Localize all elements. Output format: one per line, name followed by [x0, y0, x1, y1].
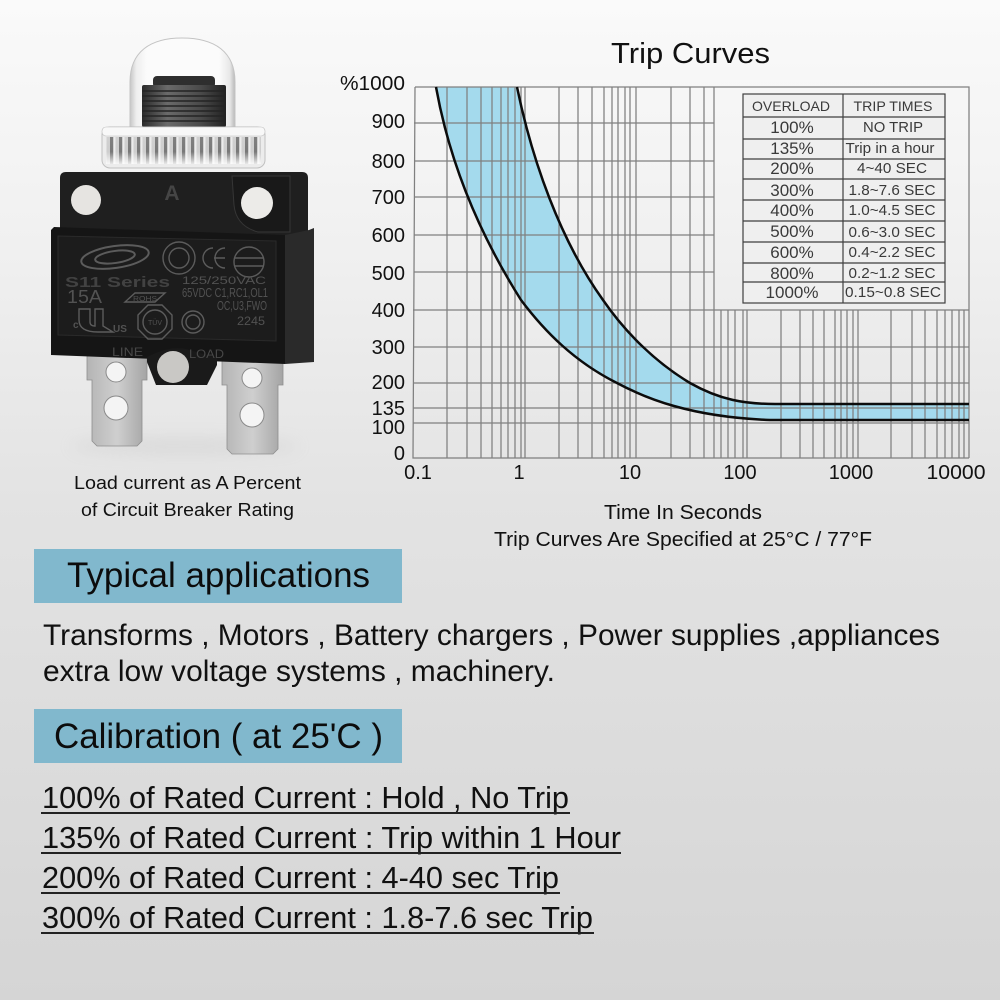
y axis labels: 400 — [372, 300, 405, 322]
threaded stem — [142, 76, 226, 127]
trip times column: TRIP TIMES — [854, 98, 932, 114]
trip band fill — [436, 87, 969, 420]
overload column: 600% — [770, 243, 814, 262]
overload column: 135% — [770, 139, 814, 158]
center latch — [147, 348, 217, 385]
certification marks — [79, 242, 264, 339]
trip times column: 0.6~3.0 SEC — [848, 224, 936, 241]
calibration list: 135% of Rated Current : Trip within 1 Hour — [42, 820, 621, 855]
y-axis caption: Load current as A Percent — [74, 473, 301, 493]
label text: 65VDC C1,RC1,OL1 — [182, 285, 268, 300]
label text: 15A — [67, 287, 102, 307]
product photo: circuit breaker — [51, 38, 314, 454]
y axis labels: 600 — [372, 225, 405, 247]
logo — [80, 241, 150, 273]
y axis labels — [340, 73, 405, 465]
y axis labels: 700 — [372, 187, 405, 209]
y axis labels: 100 — [372, 417, 405, 439]
upper curve — [517, 87, 969, 404]
y axis labels: 500 — [372, 263, 405, 285]
calibration list: 200% of Rated Current : 4-40 sec Trip — [42, 860, 559, 895]
lower curve — [436, 87, 969, 420]
trip times column: 0.15~0.8 SEC — [845, 284, 941, 301]
trip times column: 0.2~1.2 SEC — [848, 265, 936, 282]
label text: S11 Series — [65, 274, 170, 291]
body letter A: A — [164, 182, 180, 205]
label text: US — [113, 324, 127, 335]
trip times column: Trip in a hour — [846, 140, 934, 157]
soft shadow — [70, 438, 300, 454]
trip times column: NO TRIP — [863, 119, 923, 136]
x axis labels: 10000 — [926, 462, 986, 484]
main body face — [51, 227, 285, 364]
mounting holes — [71, 185, 273, 219]
label text — [65, 274, 268, 361]
y axis labels: 900 — [372, 111, 405, 133]
x axis labels: 0.1 — [404, 462, 432, 484]
y axis labels: 135 — [372, 398, 405, 420]
label text: LINE — [112, 345, 143, 359]
overload column: 200% — [770, 159, 814, 178]
terminals — [87, 356, 283, 454]
calibration list: 100% of Rated Current : Hold , No Trip — [42, 780, 569, 815]
y axis labels: 800 — [372, 151, 405, 173]
y-axis caption: of Circuit Breaker Rating — [81, 500, 294, 520]
y axis labels: %1000 — [340, 73, 405, 95]
label text: OC,U3,FWO — [217, 298, 267, 313]
overload column: 400% — [770, 201, 814, 220]
trip times column: 1.0~4.5 SEC — [848, 202, 936, 219]
overload column — [752, 98, 830, 302]
y axis labels: 300 — [372, 337, 405, 359]
heading: calibration — [34, 709, 402, 763]
heading: calibration: Calibration ( at 25'C ) — [54, 717, 383, 756]
protective dome — [130, 38, 235, 128]
upper body — [60, 172, 308, 238]
applications text: Transforms , Motors , Battery chargers , Power supplies ,appliances — [43, 619, 940, 652]
trip times column: 4~40 SEC — [857, 160, 927, 177]
label text: c — [73, 320, 79, 331]
label text: 2245 — [237, 314, 265, 328]
x axis labels: 10 — [619, 462, 641, 484]
main body side — [285, 228, 314, 364]
overload column: 1000% — [766, 283, 818, 302]
trip times column — [845, 98, 941, 301]
overload table — [743, 94, 945, 303]
label plate — [58, 236, 276, 341]
y axis labels: 0 — [394, 443, 405, 465]
heading: typical applications: Typical applications — [67, 556, 370, 595]
x axis labels: 1 — [513, 462, 525, 484]
x axis labels: 1000 — [829, 462, 873, 484]
x axis labels: 100 — [723, 462, 757, 484]
clear ring — [102, 127, 265, 168]
overload column: 500% — [770, 222, 814, 241]
x axis labels — [404, 462, 986, 484]
trip times column: 1.8~7.6 SEC — [848, 182, 936, 199]
overload column: OVERLOAD — [752, 98, 830, 114]
x-axis caption — [494, 502, 872, 551]
label text: LOAD — [189, 347, 224, 361]
label text: ROHS — [133, 296, 157, 303]
x-axis caption: Trip Curves Are Specified at 25°C / 77°F — [494, 529, 872, 551]
y axis labels: 200 — [372, 372, 405, 394]
chart title: Trip Curves — [611, 38, 770, 70]
applications text: extra low voltage systems , machinery. — [43, 655, 555, 688]
right notch — [232, 176, 290, 232]
x-axis caption: Time In Seconds — [604, 502, 762, 524]
trip curve chart — [340, 73, 986, 484]
overload column: 800% — [770, 264, 814, 283]
heading: typical applications — [34, 549, 402, 603]
applications text — [43, 619, 940, 688]
label text: 125/250VAC — [182, 275, 266, 287]
label text: TÜV — [148, 319, 162, 327]
grid — [413, 87, 969, 458]
overload column: 300% — [770, 181, 814, 200]
overload column: 100% — [770, 118, 814, 137]
table frame — [743, 94, 945, 303]
y-axis caption — [74, 473, 301, 520]
trip times column: 0.4~2.2 SEC — [848, 244, 936, 261]
calibration list — [41, 780, 621, 935]
calibration list: 300% of Rated Current : 1.8-7.6 sec Trip — [42, 900, 593, 935]
